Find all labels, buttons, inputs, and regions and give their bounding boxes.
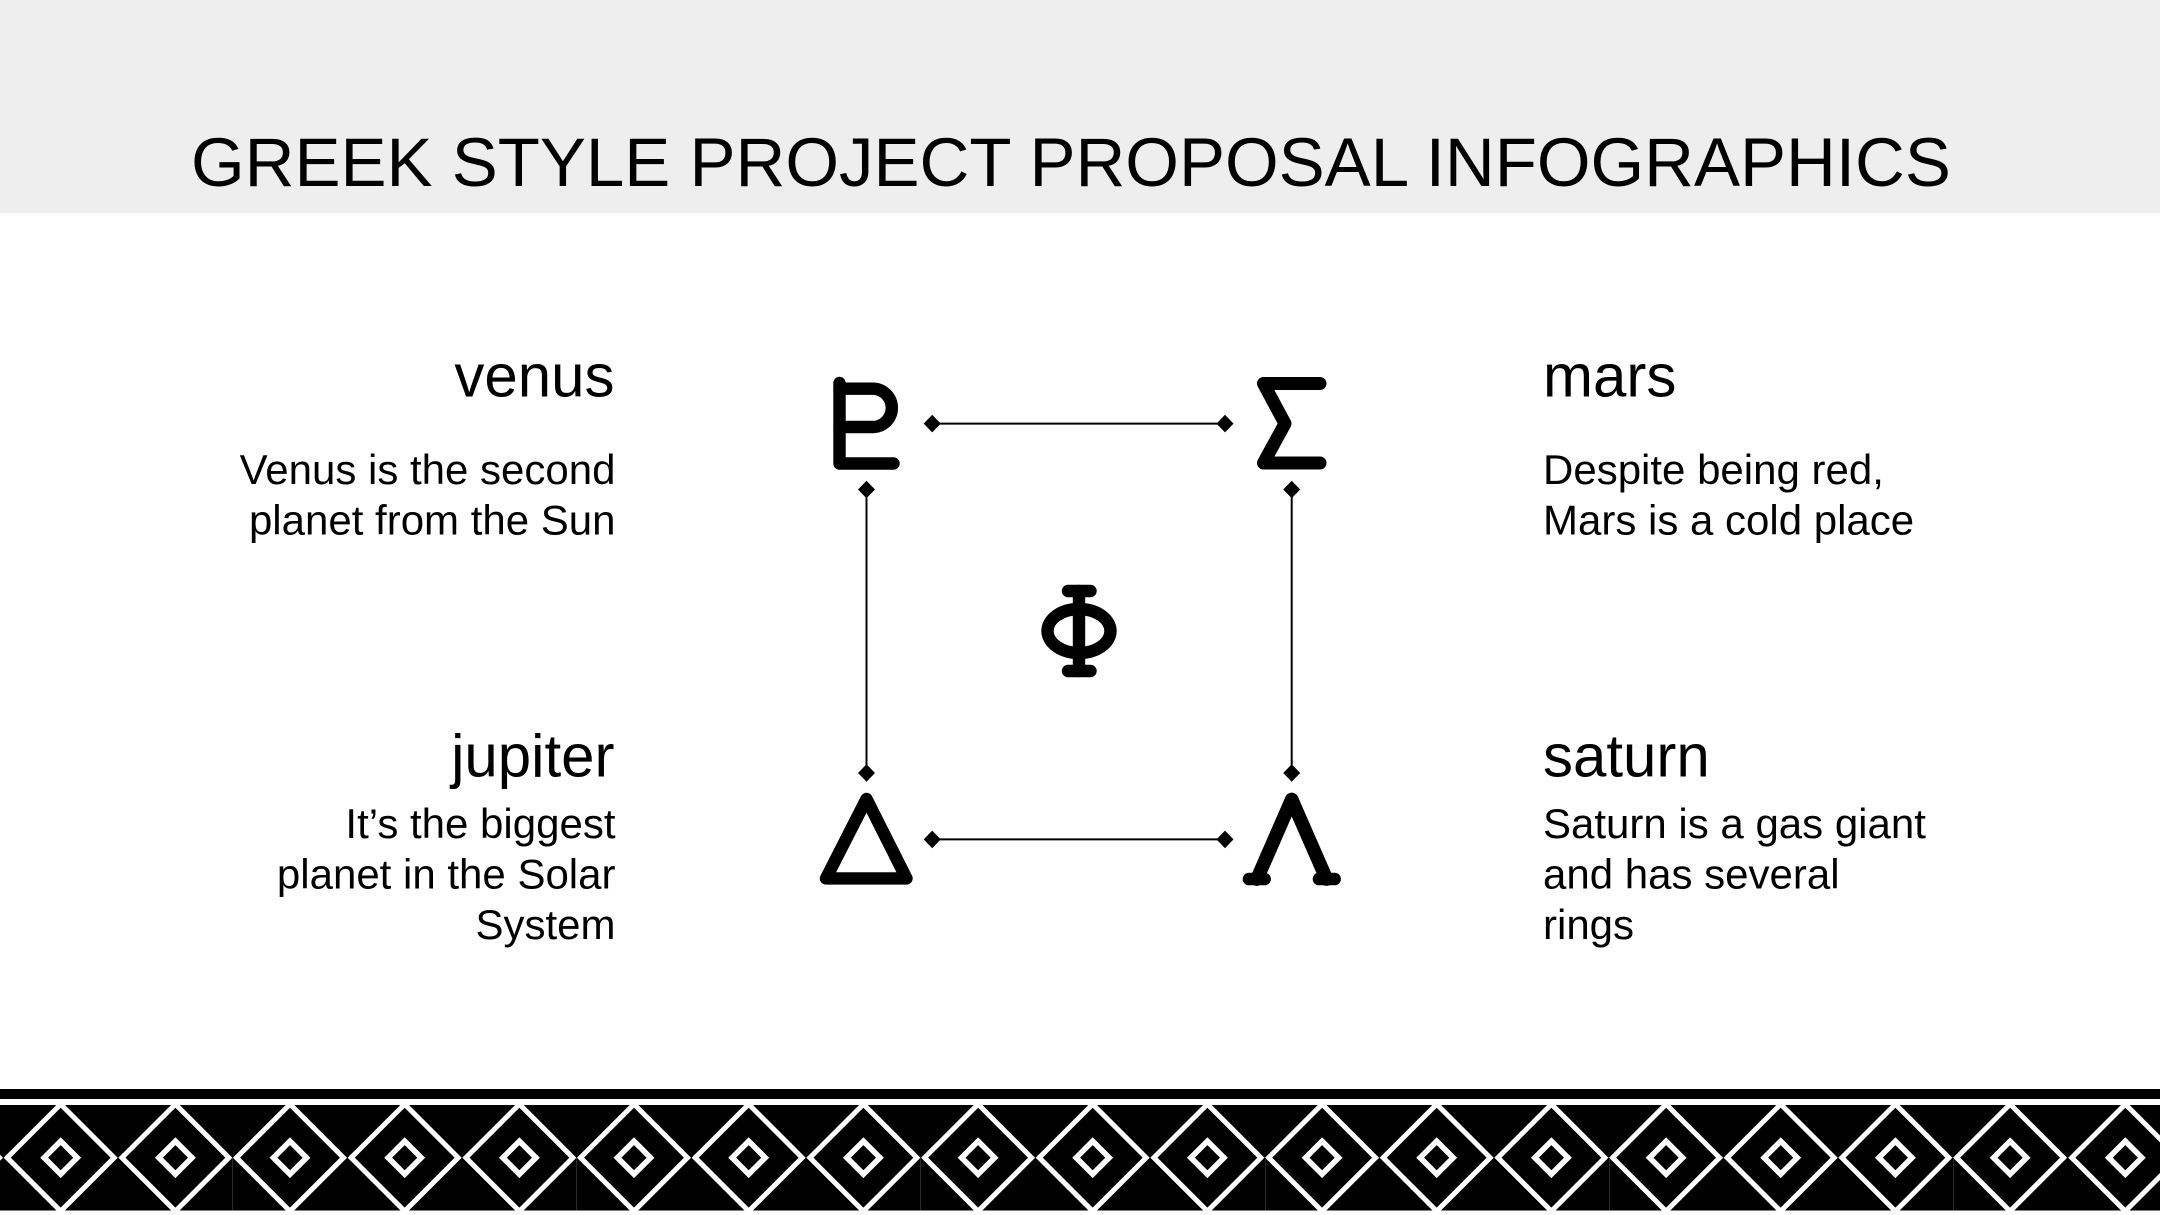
icon: delta glyph	[826, 799, 906, 878]
heading: saturn: saturn	[1543, 722, 1710, 790]
heading: venus: venus	[454, 342, 614, 410]
footer greek key band	[0, 1104, 2160, 1211]
heading: mars: mars	[1543, 342, 1676, 410]
icon: rho-epsilon glyph	[840, 383, 894, 464]
heading: jupiter: jupiter	[449, 722, 614, 790]
description: saturn: rings	[1543, 901, 1634, 948]
text block: jupiter	[277, 722, 616, 948]
description: jupiter: It’s the biggest	[345, 800, 616, 847]
description: mars: Mars is a cold place	[1543, 496, 1914, 543]
description: saturn: Saturn is a gas giant	[1543, 800, 1926, 847]
description: jupiter: System	[475, 901, 616, 948]
icon: lambda glyph	[1249, 800, 1335, 879]
description: jupiter: planet in the Solar	[277, 850, 616, 898]
text block: mars	[1543, 342, 1914, 543]
description: saturn: and has several	[1543, 850, 1840, 898]
connector: bottom horizontal	[924, 831, 1234, 848]
description: mars: Despite being red,	[1543, 446, 1884, 493]
icon: phi glyph	[1048, 591, 1110, 671]
header band	[0, 0, 2160, 213]
footer stripe	[0, 1089, 2160, 1099]
icon: sigma glyph	[1264, 384, 1320, 463]
connector: right vertical	[1283, 481, 1300, 782]
description: venus: planet from the Sun	[249, 496, 616, 543]
description: venus: Venus is the second	[240, 446, 616, 493]
text block: saturn	[1543, 722, 1926, 948]
connector: left vertical	[858, 481, 875, 782]
connector: top horizontal	[924, 415, 1234, 432]
text block: venus	[240, 342, 616, 543]
title: GREEK STYLE PROJECT PROPOSAL INFOGRAPHICS	[191, 124, 1951, 201]
